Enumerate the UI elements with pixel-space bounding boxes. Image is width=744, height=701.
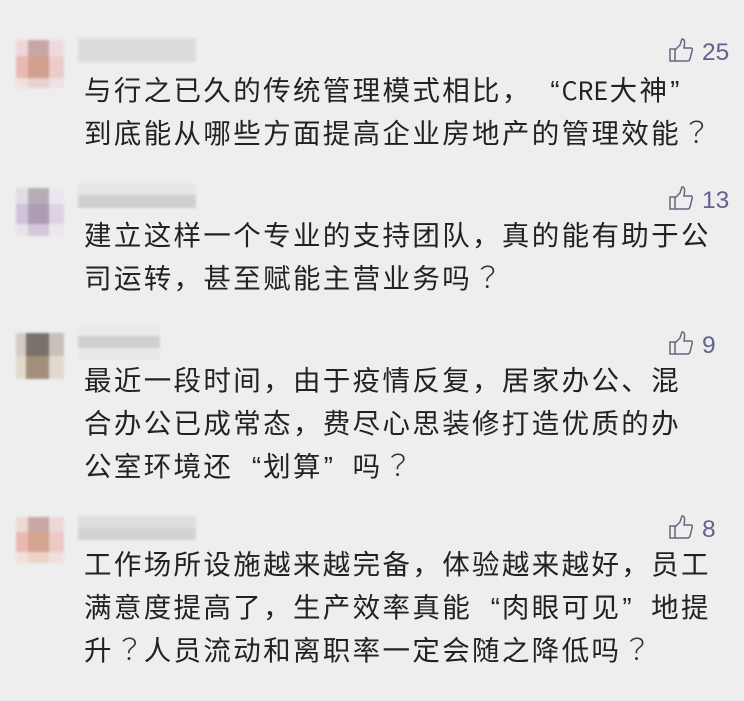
question 2 text: ？ (473, 255, 502, 297)
question 2 text: 建立这样一个专业的支持团队，真的能有助于公 (84, 213, 711, 253)
comment 3 (15, 331, 716, 485)
like count 1 (669, 38, 729, 66)
question 1 text: “ (550, 75, 560, 106)
question 3 text: 最近一段时间，由于疫情反复，居家办公、混 (84, 358, 681, 398)
question 1 text: 到底能从哪些方面提高企业房地产的管理效能 (84, 111, 681, 151)
question 4 text: ？ (622, 627, 651, 669)
question 1 text (84, 68, 711, 152)
comment 2 (15, 186, 729, 297)
avatar 1 (15, 38, 65, 89)
comment 1 (15, 38, 729, 152)
question 4 text: 满意度提高了，生产效率真能 肉眼可见 地提 (84, 585, 711, 625)
like count 4: 8 (702, 516, 716, 543)
question 4 text: ？ (115, 627, 144, 669)
question 1 text: CRE (562, 72, 608, 108)
like count 3: 9 (702, 332, 716, 359)
question 3 text: “ (252, 451, 261, 482)
question 2 text: 司运转，甚至赋能主营业务吗 (84, 256, 472, 296)
question 4 text (84, 542, 711, 669)
like count 2: 13 (702, 187, 729, 214)
blurred username 4 (78, 516, 196, 540)
question 1 text: ” (670, 75, 679, 106)
blurred username 3 (78, 326, 160, 360)
question 4 text: 工作场所设施越来越完备，体验越来越好，员工 (84, 542, 711, 582)
like count 3 (669, 331, 716, 359)
question 3 text: 合办公已成常态，费尽心思装修打造优质的办 (84, 401, 681, 441)
blurred username 1 (78, 38, 196, 62)
question 3 text: 公室环境还 划算 吗 (84, 444, 382, 484)
like count 1: 25 (702, 39, 729, 66)
blurred username 2 (78, 184, 196, 208)
avatar 4 (15, 516, 65, 564)
question 4 text: “ (491, 592, 500, 623)
question 4 text: 升 人员流动和离职率一定会随之降低吗 (84, 628, 621, 668)
question 3 text: ” (324, 451, 333, 482)
question 1 text: ？ (682, 110, 711, 152)
comment 4 (15, 515, 716, 669)
avatar 3 (15, 332, 65, 380)
question 2 text (84, 213, 711, 297)
question 3 text (84, 358, 681, 485)
question 3 text: ？ (384, 443, 413, 485)
like count 2 (669, 186, 729, 214)
avatar 2 (15, 187, 64, 237)
question 4 text: ” (622, 592, 631, 623)
like count 4 (669, 515, 716, 543)
question 1 text: 与行之已久的传统管理模式相比， 大神 (84, 68, 669, 108)
